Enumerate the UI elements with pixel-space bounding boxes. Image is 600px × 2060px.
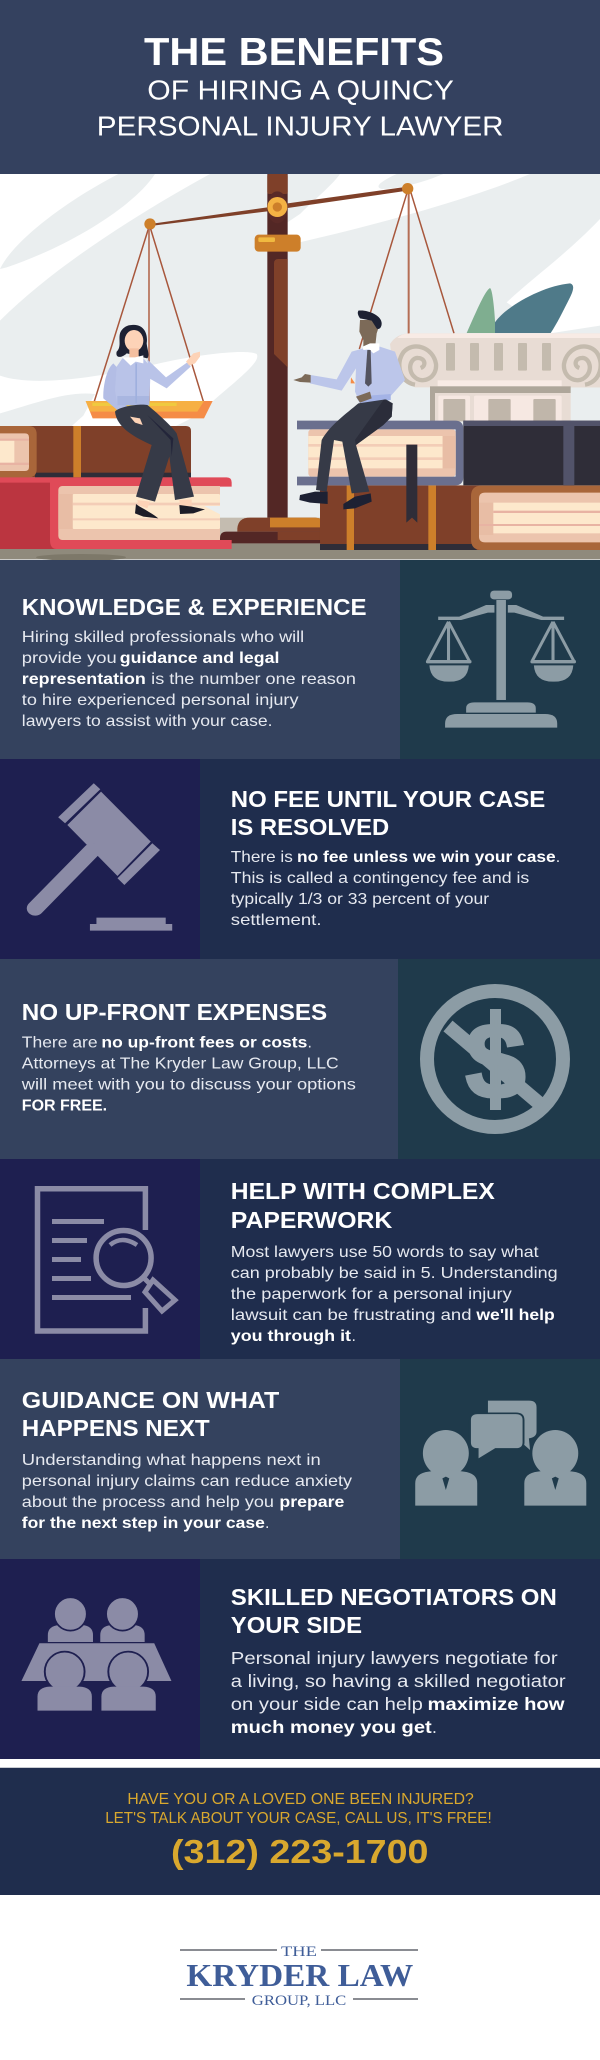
icon: negotiation table [21, 1597, 171, 1711]
body text: settlement. [231, 912, 322, 929]
body text: the paperwork for a personal injury [231, 1286, 512, 1303]
call to action banner [0, 1767, 600, 1895]
body text: typically 1/3 or 33 percent of your [231, 891, 490, 908]
hero illustration: scale and lawyers on books [0, 174, 600, 561]
logo: KRYDER LAW [186, 1957, 413, 1993]
heading: SKILLED NEGOTIATORS ON [231, 1584, 557, 1610]
body text: we'll help [475, 1307, 555, 1324]
body text: . [308, 1034, 312, 1052]
body text: much money you get [231, 1717, 432, 1737]
heading: YOUR SIDE [231, 1612, 362, 1638]
body text: . [352, 1328, 356, 1345]
body text: on your side can help [231, 1694, 423, 1714]
body text: to hire experienced personal injury [22, 692, 299, 709]
body text [21, 1034, 356, 1114]
subtitle [97, 75, 504, 142]
logo: GROUP, LLC [252, 1993, 346, 2009]
body text: lawyers to assist with your case. [22, 713, 272, 730]
icon: gavel [35, 783, 172, 931]
phone number: (312) 223-1700 [171, 1833, 428, 1870]
icon: scales of justice [426, 591, 576, 728]
body text: no up-front fees or costs [101, 1034, 307, 1052]
body text: representation [22, 671, 146, 688]
scale base [220, 518, 333, 543]
body text: Personal injury lawyers negotiate for [231, 1648, 558, 1668]
logo [180, 1944, 418, 2009]
books right [297, 421, 600, 550]
panel: no up-front expenses [0, 959, 600, 1159]
left scale pan and strings [86, 229, 213, 418]
heading: HAPPENS NEXT [22, 1415, 210, 1441]
scale strings and plants and column [359, 191, 600, 421]
heading: IS RESOLVED [231, 814, 389, 840]
body text: There is [231, 849, 293, 866]
body text: lawsuit can be frustrating and [231, 1307, 472, 1324]
body text [22, 629, 356, 730]
body text: Understanding what happens next in [22, 1452, 321, 1469]
body text: . [556, 849, 560, 866]
scale beam [144, 183, 413, 252]
body text: . [265, 1515, 269, 1532]
header banner [0, 0, 600, 174]
body text: you through it [231, 1328, 352, 1345]
body text: prepare [279, 1494, 345, 1511]
body text [231, 1244, 558, 1345]
subtitle: PERSONAL INJURY LAWYER [97, 111, 504, 142]
body text: for the next step in your case [22, 1515, 265, 1532]
body text: There are [22, 1034, 98, 1052]
body text: This is called a contingency fee and is [231, 870, 529, 887]
heading: NO UP-FRONT EXPENSES [22, 999, 327, 1025]
heading [231, 786, 545, 840]
body text: provide you [22, 650, 117, 667]
scale post [267, 174, 288, 547]
subtitle: OF HIRING A QUINCY [147, 75, 454, 106]
ground [0, 518, 600, 561]
body text: personal injury claims can reduce anxiety [22, 1473, 352, 1490]
body text [231, 849, 560, 929]
body text: Attorneys at The Kryder Law Group, LLC [22, 1056, 339, 1072]
call to action text: LET'S TALK ABOUT YOUR CASE, CALL US, IT'S FREE! [105, 1810, 492, 1827]
body text: a living, so having a skilled negotiator [231, 1671, 566, 1691]
heading: GUIDANCE ON WHAT [22, 1387, 279, 1413]
body text: Hiring skilled professionals who will [22, 629, 304, 646]
heading: KNOWLEDGE & EXPERIENCE [22, 594, 367, 620]
body text: about the process and help you [22, 1494, 274, 1511]
title: THE BENEFITS [144, 31, 444, 74]
man [293, 310, 405, 509]
icon: two people talking [415, 1401, 586, 1506]
panel: no fee [0, 759, 600, 959]
heading [22, 1387, 279, 1441]
icon: document with magnifier [38, 1189, 175, 1331]
panel: knowledge and experience [0, 560, 600, 759]
body text: . [432, 1717, 437, 1737]
body text [231, 1648, 566, 1737]
body text: will meet with you to discuss your options [21, 1076, 356, 1094]
panel: help with paperwork [0, 1159, 600, 1359]
logo: THE [281, 1944, 317, 1960]
heading: HELP WITH COMPLEX [231, 1178, 495, 1204]
icon: crossed-out dollar [427, 991, 563, 1127]
woman [103, 325, 205, 518]
heading [231, 1178, 495, 1233]
body text: guidance and legal [120, 650, 279, 667]
background swooshes, left [0, 174, 257, 431]
body text: FOR FREE. [22, 1098, 107, 1114]
heading [231, 1584, 557, 1638]
call to action text [105, 1791, 492, 1827]
body text: Most lawyers use 50 words to say what [231, 1244, 539, 1261]
body text: maximize how [428, 1694, 565, 1714]
books left [0, 426, 232, 549]
body text: can probably be said in 5. Understanding [231, 1265, 558, 1282]
heading: PAPERWORK [231, 1207, 393, 1233]
panel: skilled negotiators [0, 1559, 600, 1759]
body text: is the number one reason [151, 671, 356, 688]
panel: guidance on what happens next [0, 1359, 600, 1559]
background swooshes, right [285, 174, 600, 333]
body text: no fee unless we win your case [297, 849, 556, 866]
heading: NO FEE UNTIL YOUR CASE [231, 786, 545, 812]
icon: crossed-out dollar: $ [465, 1000, 526, 1121]
call to action text: HAVE YOU OR A LOVED ONE BEEN INJURED? [127, 1791, 474, 1808]
body text [22, 1452, 352, 1532]
